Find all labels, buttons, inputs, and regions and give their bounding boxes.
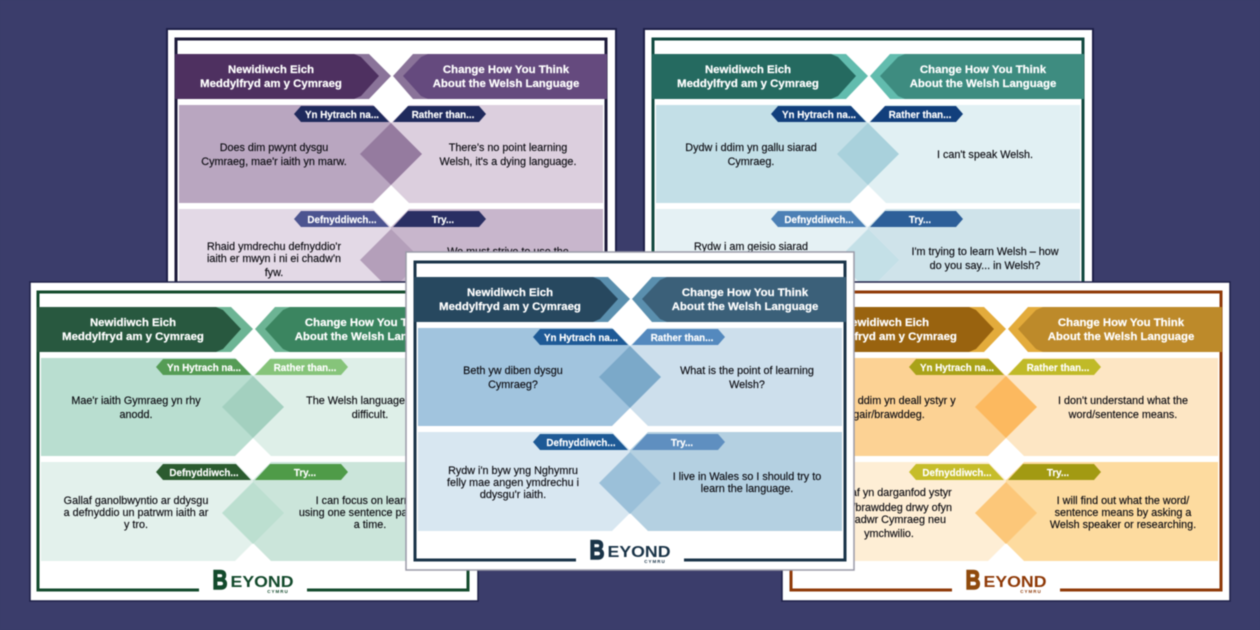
row 1 label right xyxy=(393,106,486,122)
row 2 left panel xyxy=(179,209,391,308)
row 1 right panel: Welsh? xyxy=(729,379,765,391)
header right: English title xyxy=(1008,307,1222,352)
row 2 centre diamond xyxy=(599,452,661,514)
row 1 left panel: Does dim pwynt dysgu xyxy=(220,142,328,154)
poster frame xyxy=(653,39,1083,337)
logo: Beyond Cymru: CYMRU xyxy=(644,559,666,564)
row 1 label left: Yn Hytrach na... xyxy=(305,110,379,121)
header right: English title: About the Welsh Language xyxy=(1048,331,1194,343)
row 1 label left xyxy=(909,359,1004,375)
poster sheet xyxy=(406,252,854,570)
header right: English title: Change How You Think xyxy=(682,287,809,299)
header right: English title: About the Welsh Language xyxy=(910,78,1056,90)
row 2 left panel: y tro. xyxy=(124,519,148,531)
row 2 centre diamond xyxy=(360,229,422,291)
header right: English title: About the Welsh Language xyxy=(433,78,579,90)
header left: Welsh title: Newidiwch Eich xyxy=(90,317,176,329)
row 1 label left: Yn Hytrach na... xyxy=(544,333,618,344)
panel: purple poster xyxy=(167,29,616,347)
row 1 left panel: Mae'r iaith Gymraeg yn rhy xyxy=(71,395,201,407)
row 2 label right: Try... xyxy=(909,215,931,226)
row 1 label right: Rather than... xyxy=(651,333,714,344)
row 2 label right xyxy=(1008,464,1101,480)
row 1 right panel xyxy=(253,358,465,456)
row 2 label left xyxy=(909,464,1004,480)
row 2 left panel: i siaradwr Cymraeg neu xyxy=(832,514,946,526)
row 2 label right xyxy=(632,434,725,450)
row 1 label right xyxy=(255,359,348,375)
row 2 left panel: a defnyddio un patrwm iaith ar xyxy=(64,507,209,519)
header left: Welsh title: Meddylfryd am y Cymraeg xyxy=(200,78,342,90)
row 2 label left xyxy=(533,434,628,450)
row 2 left panel: Rydw i'n byw yng Nghymru xyxy=(448,465,578,477)
row 2 right panel: I live in Wales so I should try to xyxy=(673,471,821,483)
row 2 right panel: I will find out what the word/ xyxy=(1057,495,1189,507)
logo: Beyond Cymru: EYOND xyxy=(230,574,294,591)
panel: green poster xyxy=(30,282,478,601)
header left: Welsh title: Newidiwch Eich xyxy=(705,64,791,76)
row 2 label right xyxy=(255,464,348,480)
row 1 centre diamond xyxy=(222,376,284,438)
header right: English title: About the Welsh Language xyxy=(672,301,818,313)
row 1 left panel xyxy=(656,105,868,203)
row 2 left panel: fyw. xyxy=(265,267,283,279)
poster sheet xyxy=(644,29,1093,347)
row 2 left panel: Rydw i am geisio siarad xyxy=(694,241,808,253)
row 1 right panel: There's no point learning xyxy=(449,142,567,154)
row 2 label left: Defnyddiwch... xyxy=(307,215,377,226)
header left: Welsh title: Meddylfryd am y Cymraeg xyxy=(677,78,819,90)
row 2 right panel: I'm trying to learn Welsh – how xyxy=(911,246,1059,258)
row 1 left panel: Dydw i ddim yn deall ystyr y xyxy=(822,395,956,407)
poster sheet xyxy=(167,29,616,347)
row 1 right panel: The Welsh language is too xyxy=(306,395,434,407)
row 1 label right: Rather than... xyxy=(889,110,952,121)
header left: Welsh title: Meddylfryd am y Cymraeg xyxy=(62,331,204,343)
row 2 right panel xyxy=(253,462,465,561)
header left: Welsh title: Meddylfryd am y Cymraeg xyxy=(439,301,581,313)
header right: English title xyxy=(632,277,846,322)
header right: English title xyxy=(870,54,1084,99)
row 2 left panel xyxy=(794,462,1006,561)
header left: Welsh title: Newidiwch Eich xyxy=(467,287,553,299)
row 2 right panel: Welsh speaker or researching. xyxy=(1050,519,1196,531)
row 2 left panel: felly mae angen ymdrechu i xyxy=(447,477,579,489)
row 1 label left xyxy=(771,106,866,122)
header left: Welsh title xyxy=(790,307,1006,352)
header right: English title xyxy=(393,54,607,99)
header right: English title xyxy=(255,307,469,352)
row 1 left panel: Dydw i ddim yn gallu siarad xyxy=(685,142,817,154)
row 1 label right xyxy=(1008,359,1101,375)
row 1 right panel: difficult. xyxy=(352,409,388,421)
header left: Welsh title xyxy=(175,54,391,99)
row 2 label left: Defnyddiwch... xyxy=(922,468,992,479)
header left: Welsh title: Meddylfryd am y Cymraeg xyxy=(815,331,957,343)
row 1 left panel xyxy=(418,328,630,426)
row 2 right panel xyxy=(391,209,603,308)
row 1 left panel xyxy=(179,105,391,203)
row 1 label left: Yn Hytrach na... xyxy=(782,110,856,121)
row 1 centre diamond xyxy=(837,123,899,185)
row 1 right panel: I don't understand what the xyxy=(1058,395,1188,407)
logo: Beyond Cymru: B xyxy=(212,565,228,595)
row 1 left panel: gair/brawddeg. xyxy=(853,409,925,421)
poster frame xyxy=(38,292,468,590)
row 2 label left: Defnyddiwch... xyxy=(784,215,854,226)
row 2 right panel: do you say... in Welsh? xyxy=(930,260,1040,272)
logo: Beyond Cymru: EYOND xyxy=(608,544,670,561)
logo: Beyond Cymru: EYOND xyxy=(984,574,1046,591)
row 1 left panel: Cymraeg. xyxy=(728,156,774,168)
row 1 left panel: Beth yw diben dysgu xyxy=(463,365,563,377)
row 2 left panel xyxy=(41,462,253,561)
row 2 right panel: a time. xyxy=(354,519,386,531)
row 2 centre diamond xyxy=(837,229,899,291)
poster sheet xyxy=(782,282,1230,601)
header right: English title: Change How You Think xyxy=(305,317,432,329)
logo: Beyond Cymru: CYMRU xyxy=(1020,589,1042,594)
row 2 left panel: Rhaid ymdrechu defnyddio'r xyxy=(207,241,341,253)
row 1 left panel xyxy=(794,358,1006,456)
row 1 centre diamond xyxy=(599,346,661,408)
logo: Beyond Cymru xyxy=(212,565,294,595)
logo: Beyond Cymru xyxy=(590,535,670,565)
row 1 right panel xyxy=(630,328,842,426)
header right: English title: Change How You Think xyxy=(443,64,570,76)
poster frame xyxy=(415,262,845,560)
row 2 right panel xyxy=(1006,462,1218,561)
row 1 right panel: What is the point of learning xyxy=(680,365,814,377)
logo: Beyond Cymru: B xyxy=(966,565,980,595)
panel: teal poster xyxy=(644,29,1093,347)
row 2 label left xyxy=(294,211,389,227)
row 2 centre diamond xyxy=(975,482,1037,544)
row 2 right panel: learn the language. xyxy=(701,483,793,495)
row 1 label right: Rather than... xyxy=(1027,363,1090,374)
logo: Beyond Cymru xyxy=(966,565,1046,595)
header left: Welsh title: Newidiwch Eich xyxy=(843,317,929,329)
row 1 right panel: I can't speak Welsh. xyxy=(937,149,1033,161)
row 2 left panel: iaith er mwyn i ni ei chadw'n xyxy=(207,253,341,265)
row 2 label right: Try... xyxy=(1047,468,1069,479)
logo: Beyond Cymru: B xyxy=(590,535,604,565)
row 1 label right xyxy=(632,329,725,345)
header left: Welsh title: Newidiwch Eich xyxy=(228,64,314,76)
row 1 left panel: anodd. xyxy=(119,409,153,421)
row 1 right panel: word/sentence means. xyxy=(1068,409,1177,421)
header left: Welsh title xyxy=(652,54,868,99)
row 1 label left xyxy=(294,106,389,122)
row 1 label left xyxy=(156,359,251,375)
row 1 right panel xyxy=(868,105,1080,203)
row 1 right panel xyxy=(1006,358,1218,456)
row 1 right panel: Welsh, it's a dying language. xyxy=(440,156,576,168)
row 2 right panel: sentence means by asking a xyxy=(1055,507,1191,519)
row 1 label right: Rather than... xyxy=(274,363,337,374)
row 2 label left: Defnyddiwch... xyxy=(546,438,616,449)
row 2 label right xyxy=(870,211,963,227)
row 2 right panel: We must strive to use the xyxy=(447,246,569,258)
row 2 right panel: I can focus on learning xyxy=(316,495,424,507)
row 1 right panel xyxy=(391,105,603,203)
row 2 left panel xyxy=(418,432,630,531)
row 1 centre diamond xyxy=(975,376,1037,438)
row 2 label left: Defnyddiwch... xyxy=(169,468,239,479)
poster sheet xyxy=(30,282,478,601)
row 2 label right: Try... xyxy=(432,215,454,226)
header left: Welsh title xyxy=(414,277,630,322)
row 1 left panel: Cymraeg? xyxy=(488,379,538,391)
header right: English title: Change How You Think xyxy=(920,64,1047,76)
row 2 left panel xyxy=(656,209,868,308)
row 2 centre diamond xyxy=(222,482,284,544)
poster frame xyxy=(176,39,606,337)
header left: Welsh title xyxy=(37,307,253,352)
row 2 label left xyxy=(771,211,866,227)
row 2 label right: Try... xyxy=(671,438,693,449)
row 1 centre diamond xyxy=(360,123,422,185)
row 2 left panel: ddysgu'r iaith. xyxy=(480,489,546,501)
row 1 left panel xyxy=(41,358,253,456)
row 1 label right: Rather than... xyxy=(412,110,475,121)
row 2 label left xyxy=(156,464,251,480)
row 1 left panel: Cymraeg, mae'r iaith yn marw. xyxy=(201,156,347,168)
row 2 right panel xyxy=(868,209,1080,308)
row 1 label left: Yn Hytrach na... xyxy=(167,363,241,374)
logo: Beyond Cymru: CYMRU xyxy=(267,589,289,594)
row 2 right panel: using one sentence pattern at xyxy=(299,507,441,519)
header right: English title: About the Welsh Language xyxy=(295,331,441,343)
panel: orange poster xyxy=(782,282,1230,601)
panel: blue poster (front) xyxy=(406,252,854,570)
row 1 label left xyxy=(533,329,628,345)
row 2 right panel xyxy=(630,432,842,531)
row 2 label right xyxy=(393,211,486,227)
row 2 label right: Try... xyxy=(294,468,316,479)
row 2 left panel: Byddaf yn darganfod ystyr xyxy=(826,487,952,499)
row 1 label left: Yn Hytrach na... xyxy=(920,363,994,374)
row 2 left panel: Gallaf ganolbwyntio ar ddysgu xyxy=(64,495,208,507)
row 2 left panel: ymchwilio. xyxy=(864,528,914,540)
poster frame xyxy=(791,292,1221,590)
row 2 left panel: y gair/brawddeg drwy ofyn xyxy=(826,502,952,514)
header right: English title: Change How You Think xyxy=(1058,317,1185,329)
row 1 label right xyxy=(870,106,963,122)
